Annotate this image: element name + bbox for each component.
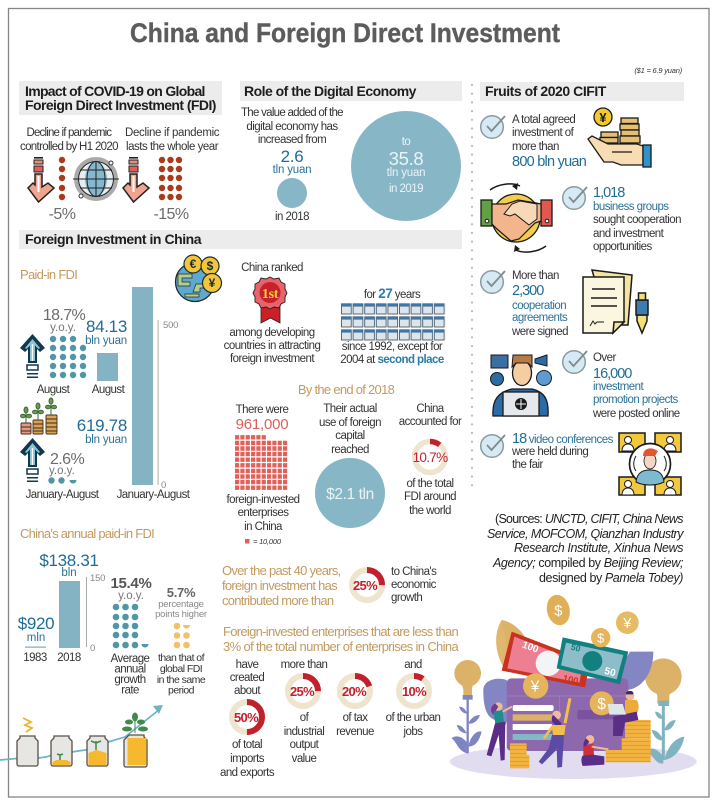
panel: annual paid-in FDI [18,526,207,696]
panel: impact of COVID-19 [19,81,222,223]
text: of tax revenue: of tax [343,712,368,724]
dots: 15.4 percent [113,604,148,648]
text: foreign-invested enterprises [226,494,300,533]
axis: 0 to 150: 0 [90,643,95,654]
text: among developing countries [224,327,320,365]
icon: check five [481,435,505,457]
axis: 0 to 500: 500 [163,320,178,331]
text: 1,018 business groups: opportunities [593,241,652,253]
banknote 100: 100 [562,673,579,686]
figure: 5.7 percentage points [155,585,207,620]
panel: enterprise shares [220,659,441,779]
coin stacks [510,720,651,768]
text block: sources: Agency; compiled by Beijing Review; [492,556,684,570]
icon: video conference [619,433,681,495]
figure: 2.6 percent: 2.6% [50,451,84,468]
text: have created about: have [236,659,259,671]
person: woman left [487,702,512,761]
text: 1,018 business groups [593,185,681,253]
text: foreign-invested enterprises: foreign-invested [226,494,300,506]
text: of tax revenue [336,712,374,738]
text block: sources: (Sources: UNCTD, CIFIT, China News [495,512,683,526]
donut: 25 percent output: 25% [290,684,315,699]
text: China ranked: China ranked [241,262,303,274]
icon: globe with currency coins: ¥ [209,276,216,290]
text: to China's economic growth [391,566,437,604]
label: 2018: 2018 [57,652,81,664]
heading: fruits of CIFIT: Fruits of 2020 CIFIT [485,83,607,99]
text: 16,000 projects: promotion projects [593,394,679,406]
figure: 15.4 percent [110,575,152,602]
text: 2,300 agreements: More than [512,270,559,282]
donut: 25 percent growth [352,570,382,600]
text: 18 video conferences: 18 video conferences [512,431,614,447]
text: than that of global FDI [157,652,206,696]
bubble: 2019: in 2019 [389,183,423,195]
bubble: 2.1 trillion: $2.1 tln [326,486,374,503]
text: of the total FDI: of the total [406,478,454,490]
icon: globe with currency coins [176,255,222,302]
figure: 5.7 percentage points: 5.7% [167,585,196,600]
text: of total imports and exports: imports [230,753,265,765]
heading: paid-in FDI: Paid-in FDI [20,267,77,282]
left bulb plant [452,660,482,753]
panel: fruits of 2020 CIFIT [480,82,684,495]
text: of industrial output value: industrial [284,726,324,738]
text: of the total FDI: FDI around [404,491,456,503]
text: 800 billion yuan: A total agreed [512,114,575,126]
donut: 20 percent: 20% [342,684,367,699]
jars [17,712,148,767]
icon: handshake [481,183,552,252]
text: 800 billion yuan: more than [512,141,559,153]
text: over the past 40 years [222,563,341,608]
icon: coin stacks with sprouts [20,398,57,434]
text: whole year scenario [125,127,220,153]
icon grid: 27 calendars [341,303,445,342]
person: woman reaching [539,698,570,768]
figure: 15.4 percent: 15.4% [110,575,152,592]
text: over the past 40 years: Over the past 40 years, [222,563,341,578]
text: whole year scenario: Decline if pandemic [125,127,220,139]
text: value added intro: digital economy has [246,121,338,133]
icon: down arrow one [28,157,54,202]
text: have created about: created [230,672,264,684]
dots: 18.7 percent [50,336,86,378]
text: H1 2020 scenario: controlled by H1 2020 [20,141,118,153]
banknote 50: 50 [570,642,582,654]
figure: 15.4 percent: y.o.y. [118,590,144,602]
text: there were: There were [236,404,288,416]
icon: hand with coins [588,108,651,167]
figure: 5.7 percentage points: percentage [158,599,204,610]
text: China accounted for: accounted for [399,416,462,428]
figure: 5.7 percentage points: points higher [155,609,207,620]
text: 800 billion yuan [512,114,587,170]
dots: fifteen percent [159,157,182,200]
coin: yuan top [616,611,639,634]
icon: check one [481,116,505,138]
icon: documents and pen [583,270,648,333]
panel: global share [399,403,462,517]
text: whole year scenario: lasts the whole year [126,141,219,153]
text: average annual growth rate: rate [121,684,139,696]
label: January-August left: January-August [26,489,100,501]
icon: check two [563,187,587,209]
figure: 2.6 trillion [273,147,311,176]
text: of total imports and exports: and exports [220,767,275,779]
icon: first place ribbon: 1st [262,287,279,302]
figure: 138.31 billion [39,551,99,579]
heading: digital economy [240,81,462,101]
text: of the urban jobs [386,712,441,738]
figure: 619.78 billion [77,416,127,446]
coin: yuan middle: ¥ [530,679,540,696]
text: value added intro: increased from [258,134,326,146]
text: H1 2020 scenario: Decline if pandemic [26,127,112,139]
coin: dollar small: $ [597,631,604,645]
heading: impact of COVID-19: Impact of COVID-19 on Global [25,83,205,99]
text: 2,300 agreements: 2,300 [512,283,544,299]
icon: hand with coins: ¥ [599,110,607,125]
dots: 5.7 [174,623,190,648]
text: to China's economic growth: growth [391,592,422,604]
icon: globe [73,159,119,199]
text: actual use of capital: use of foreign [319,417,381,429]
figure: 138.31 billion: bln [61,567,77,579]
figure: minus fifteen percent: -15% [154,206,189,223]
text: of industrial output value: value [292,753,317,765]
figure: 961,000: 961,000 [236,416,288,433]
text: 16,000 projects [592,352,680,420]
right bulb plant [645,658,684,763]
illustration: wallet, money and people [450,593,697,779]
label: August right: August [92,384,126,396]
heading: impact of COVID-19: Foreign Direct Investment (FDI) [25,97,216,113]
heading: foreign investment in China [19,230,462,249]
panel: contribution to growth [222,563,437,608]
heading: fruits of CIFIT [480,82,684,101]
donut: 10 percent [399,676,429,706]
exchange rate note: ($1 = 6.9 yuan) [634,66,683,75]
heading: less than 3 percent of enterprises [223,624,459,654]
heading: less than 3 percent of enterprises: 3% of the total number of enterprises in China [223,639,459,654]
axis: 0 to 150: 150 [90,573,105,584]
panel: paid-in FDI [20,267,191,501]
banknote 100 [502,632,590,687]
coin: yuan top: ¥ [622,616,632,632]
donut: 50 percent [232,702,262,732]
icon: person at laptop [490,355,552,416]
text: over the past 40 years: contributed more than [222,593,334,608]
text: average annual growth rate: Average [111,653,150,665]
banknote 100: 100 [520,640,540,656]
text: to China's economic growth: economic [391,579,437,591]
text: 2,300 agreements [511,270,568,338]
donut: 10 percent: 10% [402,684,427,699]
legend: square equals 10,000: = 10,000 [253,537,282,546]
text: 800 billion yuan: investment of [512,127,575,139]
text: over the past 40 years: foreign investment has [222,578,338,593]
figure: 2.6 trillion: tln yuan [273,164,311,176]
icon: globe with currency coins: € [190,257,197,271]
text: among developing countries: among developing [229,327,315,339]
figure: 619.78 billion: 619.78 [77,416,127,435]
text: of industrial output value: of [300,712,310,724]
label: 1983: 1983 [23,652,47,664]
figure: 84.13 billion [85,317,127,347]
donut: 20 percent [340,676,370,706]
text: 16,000 projects: were posted online [592,408,680,420]
text: and: and [404,659,422,671]
person: man with laptop [608,691,639,736]
text: 800 billion yuan: 800 bln yuan [512,154,587,170]
text: foreign-invested enterprises: in China [244,521,283,533]
icon: first place ribbon [253,277,287,323]
text: of industrial output value [284,712,324,765]
text: actual use of capital: capital [335,430,365,442]
heading: less than 3 percent of enterprises: Foreign-invested enterprises that are less than [223,624,458,639]
text: foreign-invested enterprises: enterprises [238,507,289,519]
text: since 1992: since 1992, except for [342,341,443,353]
text: of the total FDI: the world [409,505,451,517]
banknote 50 [557,637,628,684]
text: 1,018 business groups: sought cooperation [593,214,681,226]
text: China accounted for [399,403,462,428]
text: of the total FDI [404,478,456,517]
figure: 84.13 billion: bln yuan [85,335,127,347]
text: value added intro [241,107,343,146]
text: China accounted for: China [416,403,445,415]
coin: dollar small [591,628,610,647]
icon: down arrow two [123,157,149,202]
text: average annual growth rate: growth [114,674,146,686]
figure: 2.6 percent: y.o.y. [49,465,75,477]
bar: January-August [132,287,153,485]
text block: sources [487,512,684,585]
icon: globe with currency coins: $ [207,259,214,273]
title: China and Foreign Direct Investment [130,18,560,48]
dots: five percent [59,157,65,200]
text: among developing countries: countries in attracting [224,340,320,352]
coin: dollar top: $ [554,604,562,620]
text: of the urban jobs: of the urban [386,712,441,724]
text: to China's economic growth: to China's [391,566,437,578]
bubble: 2018 [277,178,307,208]
text: 16,000 projects: investment [593,381,644,393]
bubble: 2019: to [402,136,410,148]
icon: check four [563,351,587,373]
figure: 2.6 percent [49,451,84,477]
text: 18 video conferences: were held during [511,446,588,458]
figure: minus five percent: -5% [49,206,76,223]
wallet [507,678,628,751]
figure: 920 million: $920 [18,614,54,633]
figure: 920 million [18,614,54,644]
text: of industrial output value: output [290,739,320,751]
figure: 18.7 percent: y.o.y. [50,322,76,334]
text: of total imports and exports [220,739,275,779]
text: actual use of capital: Their actual [323,403,377,415]
dotted column divider [471,85,473,492]
bar: 2018 [59,581,80,648]
text: have created about: about [234,685,261,697]
text: 2,300 agreements: agreements [512,312,568,324]
text: 2,300 agreements: were signed [511,326,568,338]
pictogram: squares [235,437,288,488]
text: of tax revenue: revenue [336,726,374,738]
text block: sources: Service, MOFCOM, Qianzhan Industry [487,527,684,541]
heading: digital economy: Role of the Digital Economy [244,83,417,99]
figure: 18.7 percent [43,307,86,334]
bubble: 2019 [351,111,461,221]
label: August left: August [37,384,71,396]
illustration: jars of growing coins [0,705,163,767]
text block: sources: designed by Pamela Tobey) [539,571,683,585]
bar: August [97,353,118,381]
text: 1,018 business groups: business groups [593,201,669,213]
text: than that of global FDI: in the same [157,674,206,686]
panel: foreign capital [315,403,385,528]
text: since 1992 [340,341,444,366]
text block: sources: Research Institute, Xinhua News [514,541,683,555]
dots: 2.6 percent [48,477,76,484]
icon: check three [481,271,505,293]
figure: 2.6 trillion: 2.6 [281,147,303,166]
leaves behind wallet [483,620,653,740]
text: 16,000 projects: 16,000 [593,366,632,382]
donut: 50 percent: 50% [234,710,259,725]
heading: impact of COVID-19 [19,81,222,115]
figure: 84.13 billion: 84.13 [86,317,127,336]
donut: 10.7 percent: 10.7% [413,450,448,465]
text: than that of global FDI: global FDI [160,663,202,675]
donut: 25 percent output [288,676,318,706]
text: than that of global FDI: period [168,684,195,696]
axis: 0 to 150 [86,573,105,654]
text: since 1992: 2004 at second place [340,354,444,366]
label: January-August right: January-August [117,489,191,501]
banknote 50: 50 [603,666,617,679]
text: H1 2020 scenario [20,127,118,153]
label: in 2018: in 2018 [275,211,309,223]
heading: by the end of 2018: By the end of 2018 [298,382,395,397]
text: than that of global FDI: than that of [158,652,205,664]
figure: 138.31 billion: $138.31 [39,551,99,570]
heading: annual paid-in FDI: China's annual paid-in FDI [20,526,154,541]
text: more than: more than [281,659,328,671]
text: of the urban jobs: jobs [403,726,423,738]
text: 18 video conferences [511,431,614,471]
bar: 1983 [25,646,46,648]
icon: up arrow January-August [20,438,45,482]
coin: dollar right [590,691,614,715]
icon: up arrow August [20,334,45,378]
bubble: 2019: tln yuan [387,167,425,179]
figure: 920 million: mln [27,632,45,644]
figure: 619.78 billion: bln yuan [85,434,127,446]
arrow: growth line [0,705,163,760]
text: among developing countries: foreign investment [230,353,315,365]
person: kneeling woman [581,735,608,766]
text: actual use of capital: reached [331,444,369,456]
text: 2,300 agreements: cooperation [512,300,566,312]
text: value added intro: The value added of the [241,107,343,119]
donut: 25 percent growth: 25% [353,578,378,593]
text: for 27 years: for 27 years [364,286,421,301]
coin: dollar top [544,593,573,627]
text: have created about [230,659,264,697]
coin: dollar right: $ [597,696,606,713]
text: average annual growth rate: annual [114,664,146,676]
text: 1,018 business groups: and investment [593,228,665,240]
bubble: 2019: 35.8 [389,148,423,169]
text: 18 video conferences: the fair [512,459,543,471]
ground ellipse [450,744,697,779]
axis: 0 to 500: 0 [161,480,166,491]
text: 16,000 projects: Over [593,352,616,364]
axis: 0 to 500 [158,320,178,491]
text: average annual growth rate [111,653,150,696]
panel: enterprises count [226,404,300,546]
text: actual use of capital [319,403,381,456]
text: 1,018 business groups: 1,018 [593,185,625,201]
figure: 18.7 percent: 18.7% [43,307,86,324]
text: of total imports and exports: of total [232,739,262,751]
heading: foreign investment in China: Foreign Investment in China [25,231,202,247]
coin: yuan middle [523,673,548,699]
panel: digital economy [240,81,462,223]
